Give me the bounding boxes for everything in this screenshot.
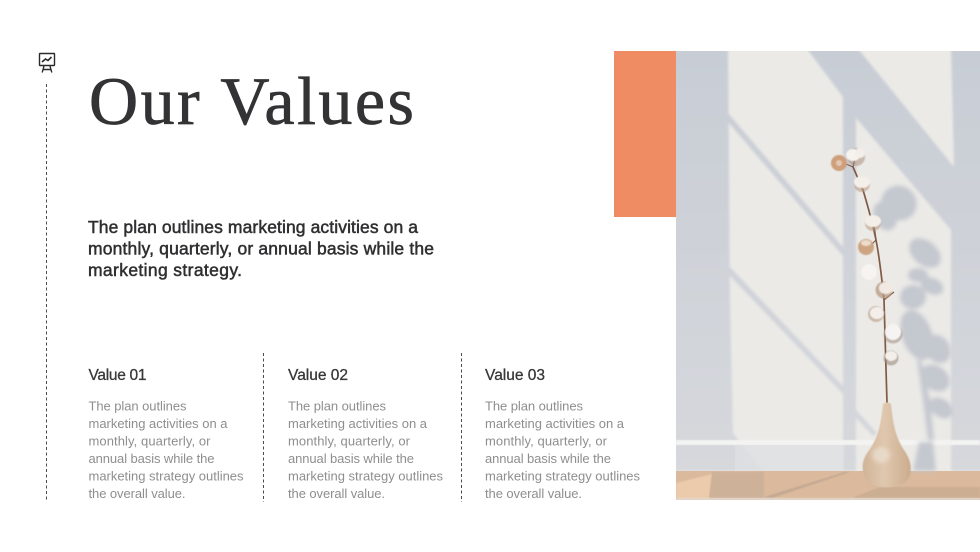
text: value 01: annual basis while the [88,451,214,466]
text: value 03: the overall value. [485,486,582,501]
title: Our Values [89,63,414,139]
heading: value 03: Value 03 [485,367,545,384]
text: value 01 [88,398,244,501]
text: value 03 [485,398,640,501]
text: value 03: marketing activities on a [485,416,625,431]
text: value 01: marketing strategy outlines [88,468,244,484]
heading: value 01: Value 01 [88,367,146,384]
vase [863,402,911,487]
lead paragraph: monthly, quarterly, or annual basis while the [88,238,434,258]
slide [38,51,980,502]
cotton buds [831,148,902,366]
text: value 01: the overall value. [88,486,186,501]
text: value 02: the overall value. [288,486,385,501]
dashed divider 1 [262,353,264,502]
text: value 03: The plan outlines [485,398,584,414]
text: value 02 [288,398,444,501]
lead paragraph: The plan outlines marketing activities on a [88,217,418,237]
skirting board [676,440,980,445]
text: value 02: marketing strategy outlines [288,468,444,484]
column: value 01 [88,367,244,501]
photo: vase with cotton stem [670,45,980,500]
vase highlight [872,447,890,463]
dashed timeline [46,84,48,501]
lead paragraph: marketing strategy. [88,260,242,280]
lead paragraph [88,217,434,280]
column: value 02 [288,367,444,501]
text: value 03: marketing strategy outlines [485,468,640,484]
text: value 01: The plan outlines [88,398,187,414]
text: value 03: monthly, quarterly, or [485,434,608,448]
text: value 02: annual basis while the [288,451,414,466]
text: value 02: marketing activities on a [288,416,428,431]
text: value 02: The plan outlines [288,398,386,414]
text: value 02: monthly, quarterly, or [288,434,411,448]
leaf shadows [869,179,957,471]
heading: value 02: Value 02 [288,367,348,384]
floor light and shade [676,472,980,500]
column: value 03 [485,367,640,501]
stem [846,158,894,403]
text: value 01: marketing activities on a [88,416,228,431]
orange accent block [614,51,676,217]
text: value 01: monthly, quarterly, or [88,434,211,448]
text: value 03: annual basis while the [485,451,611,466]
icon: presentation easel [40,54,54,72]
floor [676,471,980,500]
dashed divider 2 [460,353,462,502]
window shadows [670,45,980,471]
wall [676,51,980,500]
